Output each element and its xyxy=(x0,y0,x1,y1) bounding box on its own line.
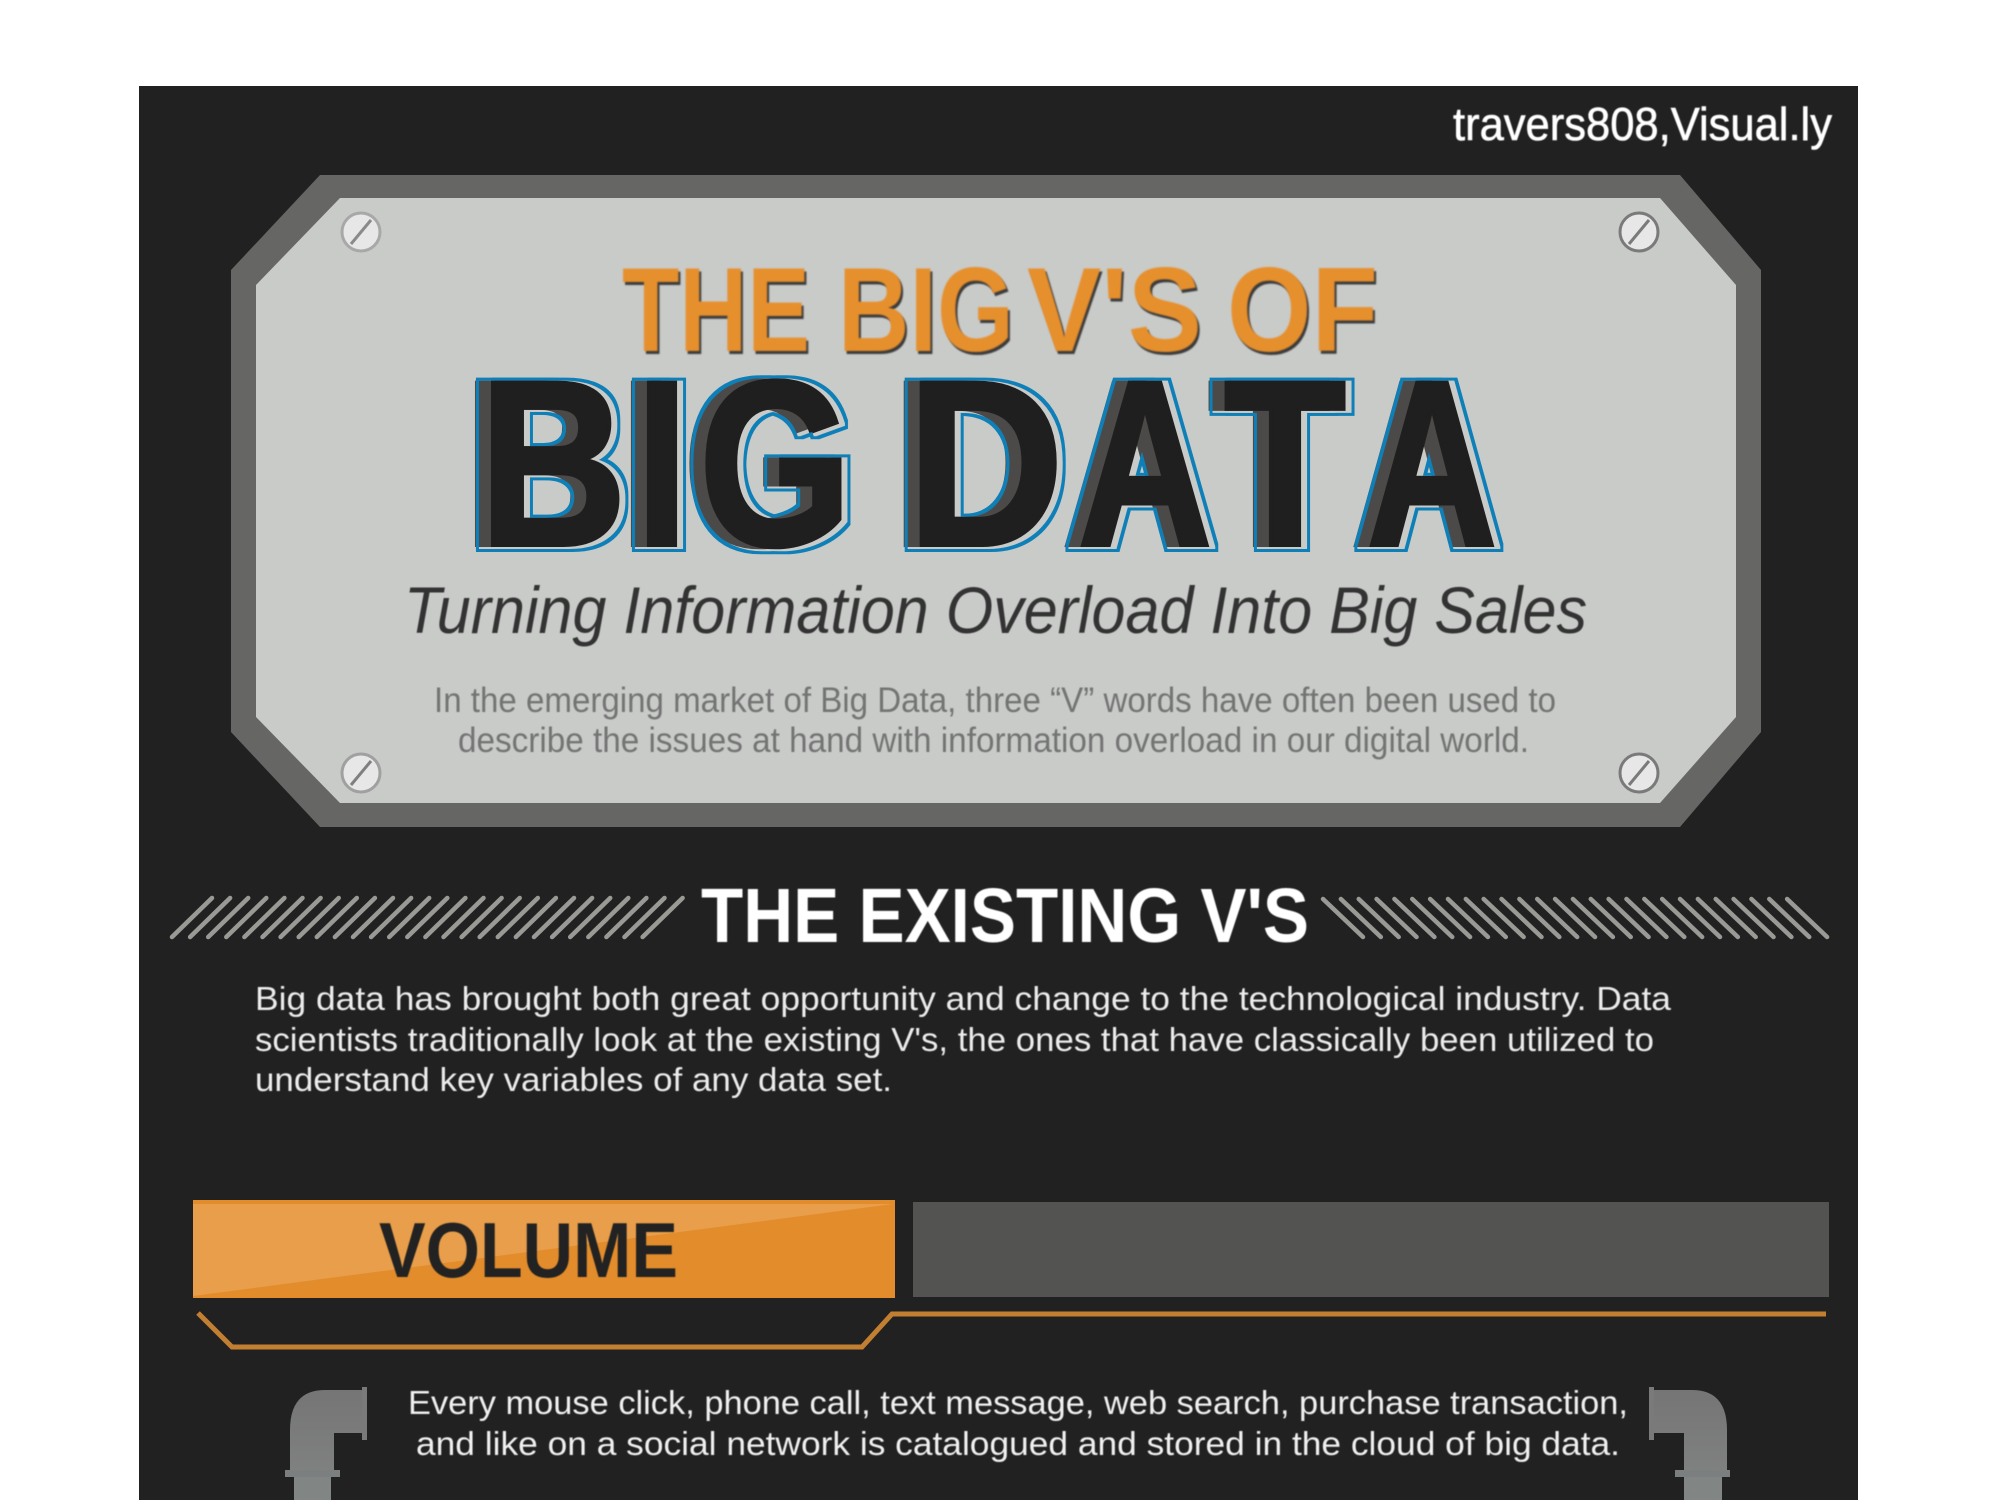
title: the big v's of: THE xyxy=(622,243,810,377)
plate frame xyxy=(231,175,1761,827)
title: the big v's of: OF xyxy=(1227,243,1378,377)
orange bracket line xyxy=(198,1313,1826,1347)
label: volume: VOLUME xyxy=(379,1206,678,1294)
intro paragraph: Big data has brought both great opportunity and change to the technological industry. Data xyxy=(255,980,1672,1017)
icon: left pipe xyxy=(285,1387,367,1500)
attribution: travers808,Visual.ly xyxy=(1453,98,1832,150)
panel: title plate xyxy=(231,175,1761,827)
stripes right xyxy=(1323,899,1827,937)
title: big data: A xyxy=(1078,332,1212,596)
intro paragraph: understand key variables of any data set. xyxy=(255,1061,892,1098)
title: big data: A xyxy=(1367,332,1497,596)
title: big data: T xyxy=(1224,332,1346,596)
title: the big v's of: BIG xyxy=(838,243,1014,377)
volume description: and like on a social network is catalogued and stored in the cloud of big data. xyxy=(416,1425,1620,1462)
plate description xyxy=(434,681,1556,760)
title: big data: D xyxy=(907,332,1064,596)
plate face xyxy=(256,198,1736,803)
volume banner xyxy=(193,1200,1829,1347)
volume description xyxy=(408,1384,1628,1462)
intro paragraph: scientists traditionally look at the existing V's, the ones that have classically been utilized to xyxy=(255,1021,1654,1058)
title: big data: I xyxy=(636,332,688,596)
stripes left xyxy=(172,898,683,937)
grey bar xyxy=(913,1202,1829,1297)
title: big data: G xyxy=(699,332,852,596)
volume description: Every mouse click, phone call, text message, web search, purchase transaction, xyxy=(408,1384,1628,1421)
title: big data xyxy=(479,332,1497,596)
icon: screw bottom left xyxy=(342,754,380,792)
icon: screw top left xyxy=(342,213,380,251)
icon: screw top right xyxy=(1620,213,1658,251)
intro paragraph xyxy=(255,980,1672,1098)
plate description: describe the issues at hand with information overload in our digital world. xyxy=(458,721,1529,760)
icon: screw bottom right xyxy=(1620,754,1658,792)
plate description: In the emerging market of Big Data, three “V” words have often been used to xyxy=(434,681,1556,720)
orange label bar xyxy=(193,1200,895,1298)
icon: right pipe xyxy=(1649,1387,1730,1500)
title: big data: B xyxy=(479,332,627,596)
title: the big v's of xyxy=(622,243,1378,377)
heading: the existing v's: THE EXISTING V'S xyxy=(701,873,1309,959)
title: the big v's of: V'S xyxy=(1027,243,1202,377)
bar gloss xyxy=(193,1204,893,1296)
subtitle: Turning Information Overload Into Big Sales xyxy=(404,573,1587,647)
